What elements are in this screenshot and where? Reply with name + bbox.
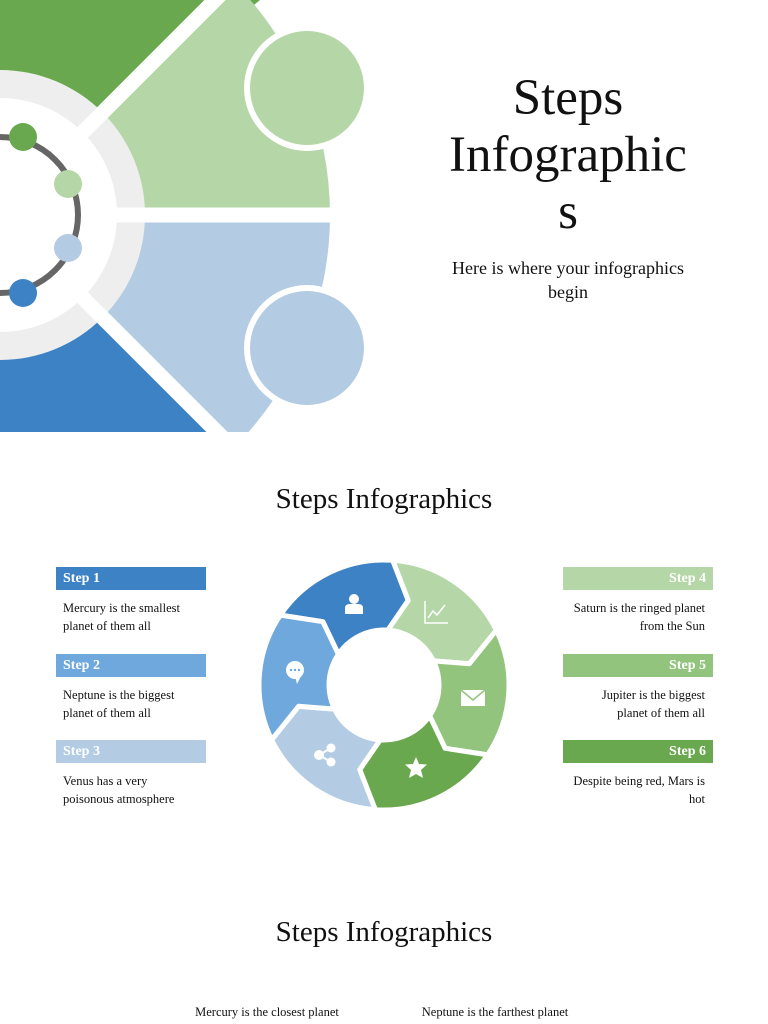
cycle chart bbox=[262, 562, 506, 808]
step 4 bbox=[563, 567, 713, 633]
hero graphic bbox=[0, 0, 364, 432]
segment 6 bbox=[346, 700, 488, 845]
icon: share bbox=[315, 744, 334, 766]
icon: speech bubble bbox=[286, 661, 304, 684]
step 6 bbox=[563, 740, 713, 806]
step 6: Step 6 bbox=[669, 744, 706, 759]
segment 4 bbox=[386, 560, 501, 665]
step 3: Venus has a very poisonous atmosphere bbox=[63, 774, 174, 806]
segment: light green bbox=[0, 0, 330, 215]
icon: person bbox=[345, 594, 363, 614]
step 1: Step 1 bbox=[63, 571, 100, 586]
text: neptune: Neptune is the farthest planet bbox=[422, 1005, 568, 1019]
step 3 bbox=[56, 740, 206, 806]
segment: dark blue bbox=[0, 215, 260, 475]
orbit ring with dots bbox=[0, 123, 82, 307]
title: Steps bbox=[513, 70, 623, 126]
title bbox=[449, 70, 687, 240]
title: s bbox=[558, 184, 578, 240]
segment: light blue bbox=[0, 215, 330, 448]
icon: chart bbox=[425, 601, 448, 623]
step 2: Step 2 bbox=[63, 658, 100, 673]
segment 3 bbox=[267, 705, 382, 810]
step 4: Step 4 bbox=[669, 571, 706, 586]
step 4: Saturn is the ringed planet from the Sun bbox=[574, 601, 705, 633]
icon: mail bbox=[461, 690, 485, 706]
segment 2 bbox=[224, 600, 360, 740]
step 2 bbox=[56, 654, 206, 720]
circle: light blue bbox=[244, 285, 370, 411]
step 2: Neptune is the biggest planet of them all bbox=[63, 688, 174, 720]
circle: light green bbox=[244, 25, 370, 151]
step 1: Mercury is the smallest planet of them all bbox=[63, 601, 180, 633]
step 5: Step 5 bbox=[669, 658, 706, 673]
step 3: Step 3 bbox=[63, 744, 100, 759]
segment 5 bbox=[408, 630, 544, 770]
step 5 bbox=[563, 654, 713, 720]
step 6: Despite being red, Mars is hot bbox=[573, 774, 705, 806]
subtitle: Here is where your infographics begin bbox=[452, 258, 684, 302]
step 1 bbox=[56, 567, 206, 633]
segment 1 bbox=[280, 525, 422, 670]
section 3 heading: Steps Infographics bbox=[276, 916, 492, 948]
step 5: Jupiter is the biggest planet of them all bbox=[602, 688, 705, 720]
section 2 heading: Steps Infographics bbox=[276, 483, 492, 515]
title: Infographic bbox=[449, 127, 687, 183]
segment: dark green bbox=[0, 0, 260, 215]
icon: star bbox=[405, 757, 427, 778]
text: mercury: Mercury is the closest planet bbox=[195, 1005, 339, 1019]
